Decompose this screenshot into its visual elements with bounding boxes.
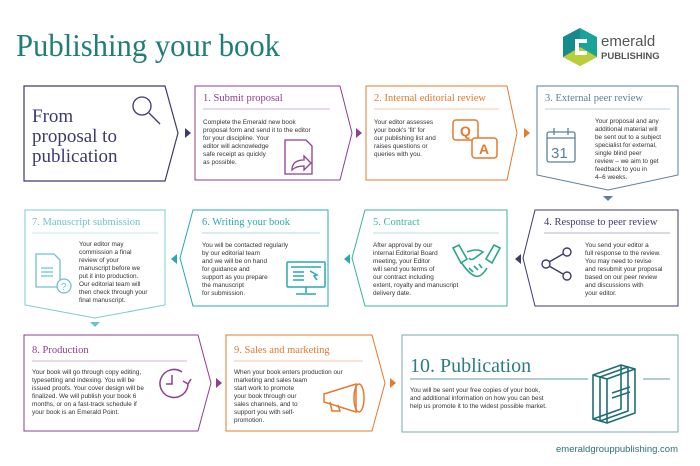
panel: intro: From <box>32 106 73 127</box>
panel: 8 production: 8. Production <box>32 345 89 356</box>
panel: 5 contract: our contract including <box>373 274 434 281</box>
panel: 8 production: finalized. We will publish your book 6 <box>32 393 137 400</box>
panel: 2 internal editorial review: queries with you. <box>374 151 422 158</box>
icon: document question: ? <box>61 282 67 293</box>
icon: handshake <box>453 245 500 276</box>
panel: 2 internal editorial review: raises questions or <box>374 143 429 150</box>
panel: 7 manuscript submission: put it into production. <box>79 273 139 280</box>
panel: 6 writing your book: the manuscript <box>202 282 244 289</box>
panel: 4 response to peer review: You send your editor a <box>585 242 649 249</box>
panel: 1 submit proposal: 1. Submit proposal <box>203 93 283 104</box>
panel: 9 sales and marketing: your book through our <box>234 393 297 400</box>
arrow <box>216 378 222 388</box>
panel: 5 contract: After approval by our <box>373 242 433 249</box>
panel: 8 production: months, or on a fast-track schedule if <box>32 401 137 408</box>
panel: 5 contract: meeting, your Editor <box>373 258 431 265</box>
arrow <box>524 128 530 138</box>
panel: 9 sales and marketing: start work to promote <box>234 385 294 392</box>
arrow <box>390 378 396 388</box>
panel: 2 internal editorial review: 2. Internal editorial review <box>374 93 486 104</box>
icon: monitor <box>287 262 325 294</box>
panel: 10 publication: 10. Publication <box>410 355 531 377</box>
icon: megaphone <box>324 384 364 412</box>
panel: 8 production: issued proofs. Your cover design will be <box>32 385 144 392</box>
panel: 5 contract <box>352 210 507 306</box>
panel: 2 internal editorial review <box>366 86 517 180</box>
arrow <box>356 128 362 138</box>
arrow left <box>171 254 177 264</box>
arrow down <box>90 322 100 327</box>
panel: 5 contract: extent, royalty and manuscript <box>373 282 458 289</box>
panel: 5 contract: will send you terms of <box>372 266 435 273</box>
url: emeraldgrouppublishing.com <box>556 444 678 455</box>
panel: 7 manuscript submission: review of your <box>79 257 120 264</box>
panel: 6 writing your book: support as you prepare <box>202 274 268 281</box>
panel: 10 publication: help us promote it to the widest possible market. <box>410 403 547 410</box>
arrow down <box>603 196 613 201</box>
arrow left <box>515 254 521 264</box>
panel: 7 manuscript submission: then check through your <box>79 289 148 296</box>
panel: 2 internal editorial review: Your editor assesses <box>374 119 433 126</box>
icon: calendar <box>547 128 575 162</box>
panel: 2 internal editorial review: your book's 'fit' for <box>374 127 426 134</box>
panel: 3 external peer review: review – we aim to get <box>595 158 659 165</box>
panel: 8 production: your book is an Emerald Point. <box>32 409 119 416</box>
panel: 4 response to peer review: based on our peer review <box>585 274 658 281</box>
panel: 7 manuscript submission: Your editor may <box>79 241 124 248</box>
panel: 6 writing your book: and we will be on hand <box>202 258 267 265</box>
icon: Q A bubbles: A <box>479 141 489 157</box>
panel: 7 manuscript submission: final manuscript. <box>79 297 126 304</box>
panel: 6 writing your book: You will be contacted regularly <box>202 242 289 249</box>
panel: 1 submit proposal: editor will acknowledge <box>203 143 269 150</box>
panel: 9 sales and marketing: sales channels, and to <box>234 401 298 408</box>
icon: magnifier <box>133 97 160 124</box>
panel: 4 response to peer review: and resubmit your proposal <box>585 266 662 273</box>
panel: 9 sales and marketing: When your book enters production our <box>234 369 344 376</box>
icon: Q A bubbles <box>453 120 497 158</box>
panel: 7 manuscript submission: commission a final <box>79 249 132 256</box>
panel: 3 external peer review: single blind peer <box>595 150 642 157</box>
panel: 3 external peer review: 3. External peer review <box>545 93 643 104</box>
panel: 8 production: typesetting and indexing. You will be <box>32 377 135 384</box>
icon: document share <box>285 140 312 174</box>
icon: books <box>593 365 635 423</box>
panel: 2 internal editorial review: our publishing list and <box>374 135 436 142</box>
panel: 7 manuscript submission: manuscript before we <box>79 265 141 272</box>
panel: 6 writing your book: for submission. <box>202 290 245 297</box>
panel: 1 submit proposal: for your discipline. Your <box>203 135 270 142</box>
panel: 10 publication: You will be sent your free copies of your book, <box>410 387 540 394</box>
panel: intro: proposal to <box>32 126 117 147</box>
panel: 8 production: Your book will go through copy editing, <box>32 369 141 376</box>
panel: 6 writing your book: 6. Writing your book <box>202 217 291 228</box>
panel: 6 writing your book: by our editorial team <box>202 250 260 257</box>
panel: 9 sales and marketing <box>226 335 385 431</box>
panel: intro: publication <box>32 146 118 167</box>
panel: 9 sales and marketing: 9. Sales and marketing <box>234 345 330 356</box>
panel: 4 response to peer review: 4. Response to peer review <box>544 217 658 228</box>
icon: calendar: 31 <box>551 145 568 162</box>
title: Publishing your book <box>16 27 280 63</box>
panel: 9 sales and marketing: marketing and sales team <box>234 377 307 384</box>
logo: emerald <box>601 33 655 50</box>
panel: 1 submit proposal: proposal form and send it to the editor <box>203 127 312 134</box>
panel: intro <box>24 86 178 181</box>
panel: 10 publication <box>402 335 678 432</box>
panel: 4 response to peer review: You may need to revise <box>585 258 652 265</box>
panel: 3 external peer review: 4–6 weeks. <box>595 174 628 181</box>
panel: 5 contract: delivery date. <box>373 290 411 297</box>
panel: 3 external peer review <box>537 86 678 190</box>
icon: share <box>542 248 571 280</box>
icon: Q A bubbles: Q <box>460 123 471 139</box>
panel: 7 manuscript submission: Our editorial team will <box>79 281 140 288</box>
panel: 8 production <box>24 335 211 431</box>
panel: 7 manuscript submission: 7. Manuscript submission <box>32 217 141 228</box>
panel: 7 manuscript submission <box>25 210 165 318</box>
icon: clock <box>160 369 191 397</box>
panel: 6 writing your book: for guidance and <box>202 266 250 273</box>
panel: 3 external peer review: feedback to you in <box>595 166 647 173</box>
arrow left <box>344 254 350 264</box>
panel: 3 external peer review: be sent out to a subject <box>595 134 661 141</box>
panel: 4 response to peer review: full response to the review. <box>585 250 661 257</box>
logo <box>563 28 660 66</box>
panel: 3 external peer review: additional material will <box>595 126 658 133</box>
panel: 1 submit proposal: Complete the Emerald new book <box>203 119 297 126</box>
panel: 1 submit proposal <box>195 86 352 180</box>
panel: 4 response to peer review: your editor. <box>585 290 617 297</box>
panel: 3 external peer review: Your proposal and any <box>595 118 660 125</box>
panel: 6 writing your book <box>180 210 328 306</box>
logo: PUBLISHING <box>601 51 660 62</box>
panel: 5 contract: internal Editorial Board <box>373 250 438 257</box>
arrow <box>185 128 191 138</box>
panel: 9 sales and marketing: support you with self- <box>234 409 294 416</box>
panel: 10 publication: and additional information on how you can best <box>410 395 544 402</box>
panel: 4 response to peer review <box>523 210 678 306</box>
panel: 1 submit proposal: safe receipt as quickly <box>203 151 267 158</box>
panel: 4 response to peer review: and discussions with <box>585 282 644 289</box>
panel: 5 contract: 5. Contract <box>373 217 420 228</box>
panel: 1 submit proposal: as possible. <box>203 159 237 166</box>
panel: 9 sales and marketing: promotion. <box>234 417 264 424</box>
panel: 3 external peer review: specialist for external, <box>595 142 657 149</box>
